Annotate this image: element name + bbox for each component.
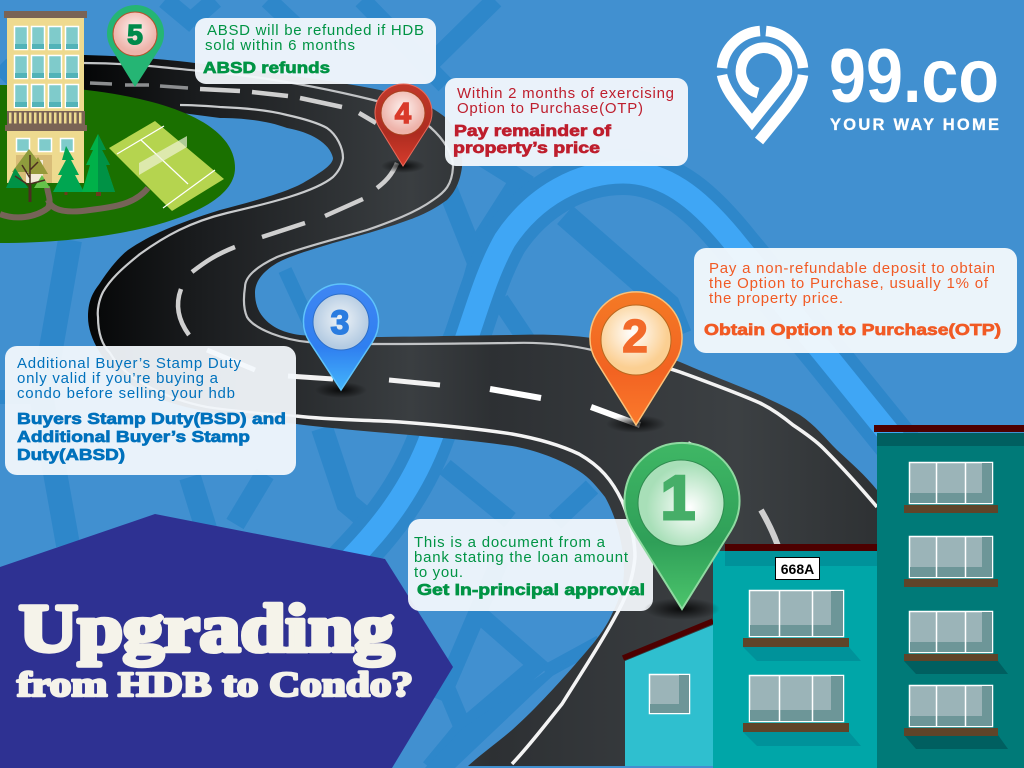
right block windows [904,462,1008,749]
callout: step 4: Pay remainder of [454,123,612,140]
callout: step 1: bank stating the loan amount [414,549,629,566]
callout: step 2: the Option to Purchase, usually 1% of [709,275,989,292]
logo pin icon [722,31,803,141]
callout: step 2: Obtain Option to Purchase(OTP) [704,322,1001,339]
condo building [4,11,87,183]
callout: step 1 [408,519,653,611]
callout: step 1: Get In-principal approval [417,582,645,599]
callout: step 4: property’s price [453,140,600,157]
building: right block [874,425,1024,768]
title text [17,590,413,704]
callout: step 4: Within 2 months of exercising [457,85,674,102]
title text: Upgrading [19,590,394,666]
callout: step 3: only valid if you’re buying a [17,370,219,387]
callout: step 5 [195,18,436,84]
callout: step 3: Additional Buyer’s Stamp Duty [17,355,242,372]
callout: step 2: the property price. [709,290,843,307]
callout: step 5: ABSD will be refunded if HDB [207,22,424,39]
pin 1: 1 [661,464,695,533]
pin 2: 2 [622,310,648,362]
pin 4: 4 [395,98,411,130]
pin 1 [624,443,740,620]
tennis court [109,121,224,211]
pin 4 [375,84,432,173]
title text: from HDB to Condo? [17,665,413,704]
sign 668A: 668A [781,561,814,577]
callout: step 2 [694,248,1017,353]
callout: step 3: Duty(ABSD) [17,447,125,464]
pin 5: 5 [127,19,143,50]
callout: step 3 [5,346,296,475]
pin 3 [304,284,378,398]
pin 3: 3 [331,304,349,342]
callout: step 3: Buyers Stamp Duty(BSD) and [17,411,286,428]
logo wordmark: 99.co [829,34,999,119]
pin 5 [107,5,164,87]
callout: step 4 [445,78,688,166]
callout: step 4: Option to Purchase(OTP) [457,100,643,117]
title banner [0,514,453,768]
trees [6,134,115,202]
sign 668A [776,558,820,580]
balcony windows [743,590,861,746]
garden path [0,186,148,217]
building: middle block [713,544,877,768]
callout: step 1: This is a document from a [414,534,606,551]
callout: step 1: to you. [414,564,463,581]
callout: step 5: ABSD refunds [203,60,330,77]
logo tagline: YOUR WAY HOME [830,116,999,134]
building: left wing [623,621,713,766]
logo: 99.co [722,31,999,141]
road [83,55,877,766]
center dashes [90,83,778,546]
callout: step 3: condo before selling your hdb [17,385,235,402]
hill [0,11,235,243]
callout: step 5: sold within 6 months [205,37,355,54]
pin 2 [590,292,682,433]
callout: step 3: Additional Buyer’s Stamp [17,429,250,446]
callout: step 2: Pay a non-refundable deposit to obtain [709,260,995,277]
background-colour strip under the road [460,766,713,768]
